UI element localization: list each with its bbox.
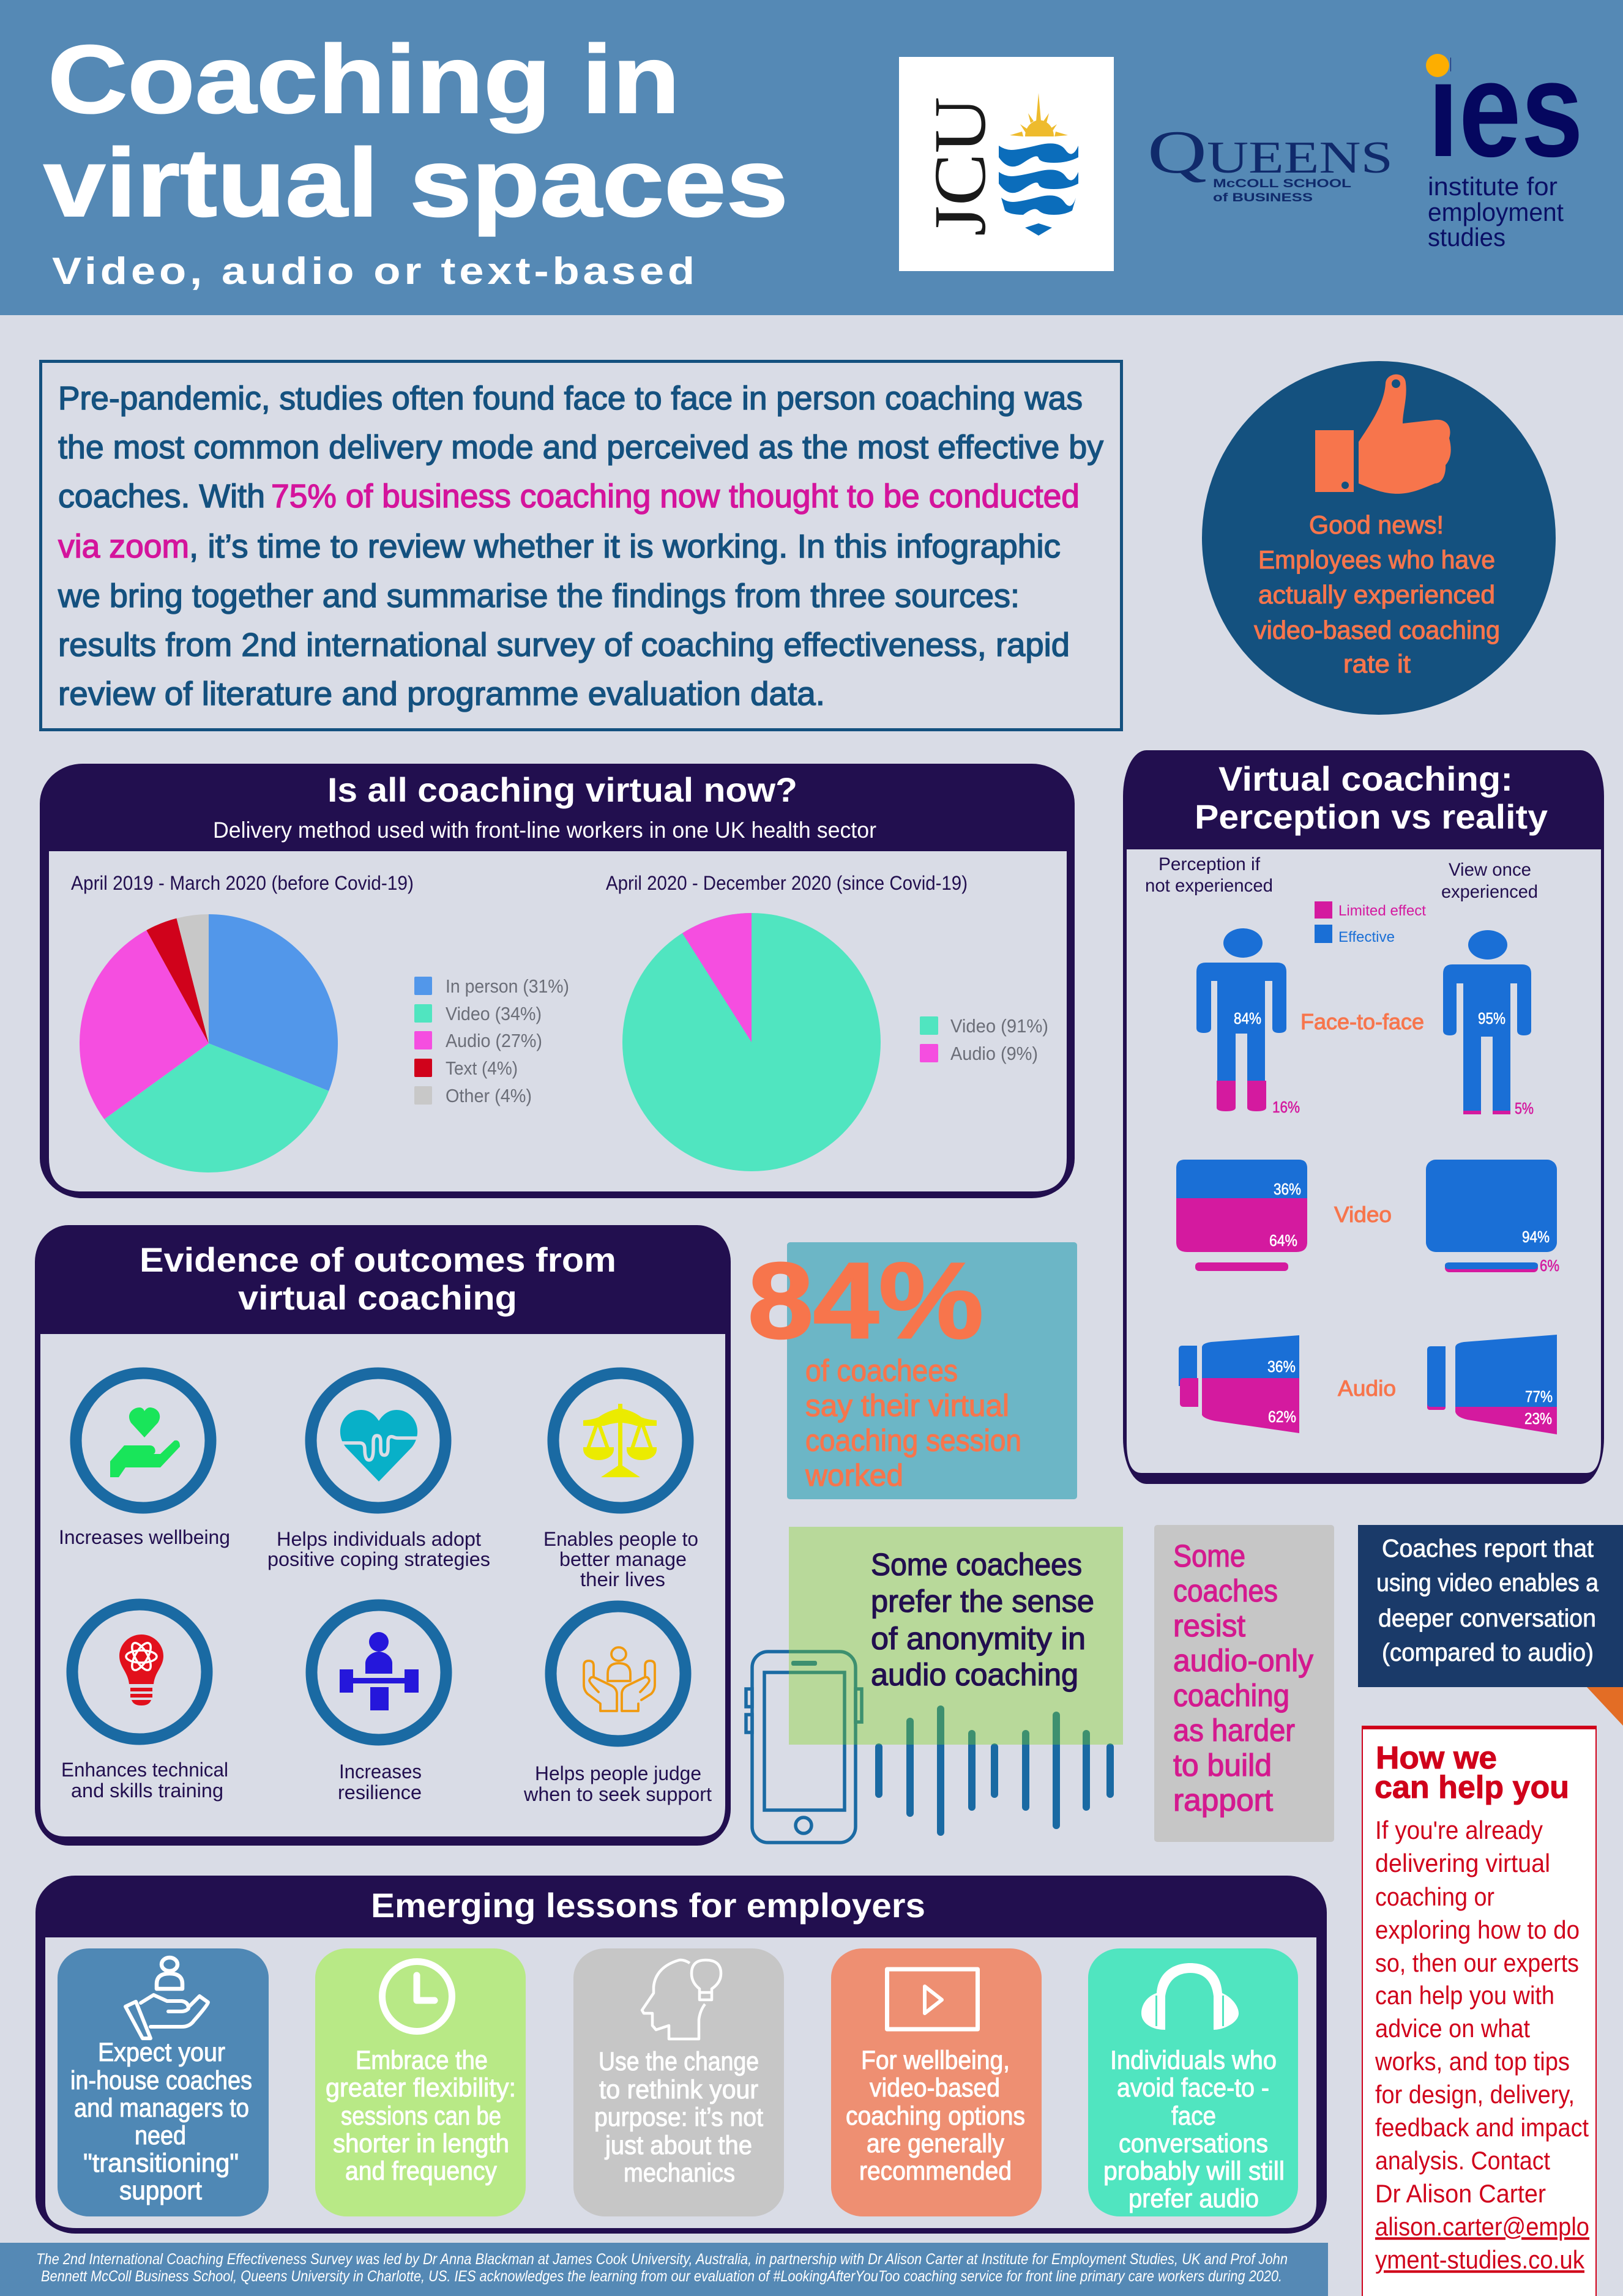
- logo: Queens: McCOLL SCHOOL: [1213, 177, 1352, 190]
- card: video-based options: coaching options: [846, 2101, 1025, 2131]
- header band: [0, 0, 1623, 315]
- heading: Is all coaching virtual now?: [327, 770, 797, 809]
- callout: coaches resist audio-only: [1154, 1525, 1334, 1842]
- logo: Queens: UEENS: [1207, 133, 1393, 183]
- contact text: for design, delivery,: [1375, 2080, 1575, 2109]
- icon: speaker, experienced: [1427, 1335, 1557, 1434]
- intro text box: via zoom: [58, 528, 189, 565]
- heading: Emerging lessons for employers: [371, 1886, 925, 1925]
- icon: speaker, perception: 62%: [1268, 1407, 1296, 1426]
- icon: monitor, experienced: [1426, 1160, 1559, 1275]
- card: in-house coaches: support: [119, 2176, 202, 2205]
- column label: perception if not experienced: not experienced: [1145, 876, 1273, 896]
- legend: since Covid-19: [920, 1015, 1048, 1064]
- callout: anonymity in audio coaching: of anonymity in: [871, 1621, 1086, 1656]
- heading: can help you: [1375, 1770, 1569, 1805]
- contact text: advice on what: [1375, 2014, 1530, 2043]
- contact text: alison.carter@emplo: [1375, 2212, 1589, 2241]
- legend: Limited effect: [1338, 903, 1426, 919]
- callout: 84 percent: coaching session: [805, 1423, 1021, 1458]
- callout: anonymity in audio coaching: [746, 1527, 1123, 1843]
- logo: IES: studies: [1428, 223, 1505, 252]
- icon: video player: [887, 1969, 978, 2029]
- card: prefer audio: avoid face-to -: [1117, 2073, 1269, 2103]
- callout: coaches resist audio-only: as harder: [1173, 1713, 1295, 1748]
- label: face-to-face: Face-to-face: [1300, 1009, 1424, 1034]
- column label: view once experienced: [1441, 860, 1538, 902]
- outcome: increases resilience: resilience: [338, 1781, 422, 1803]
- icon: phone with sound bars: [746, 1652, 1114, 1843]
- panel: perception vs reality: [1123, 750, 1604, 1484]
- outcome: positive coping strategies: positive coping strategies: [267, 1548, 490, 1570]
- heading: How we: [1376, 1740, 1497, 1776]
- pie chart: before Covid-19: April 2019 - March 2020 (before Covid-19): [71, 872, 414, 894]
- card: rethink your purpose: to rethink your: [599, 2075, 758, 2104]
- card: in-house coaches: [58, 1948, 269, 2216]
- panel: evidence of outcomes: [35, 1225, 731, 1846]
- icon: headphones: [1141, 1963, 1239, 2030]
- contact text: works, and top tips: [1375, 2047, 1570, 2076]
- legend: since Covid-19: Video (91%): [950, 1015, 1048, 1037]
- callout: deeper conversation: [1358, 1525, 1623, 1726]
- intro text box: 75% of business coaching now thought to be conducted: [271, 478, 1080, 515]
- outcome: increases resilience: Increases: [339, 1761, 422, 1783]
- heading: Evidence of outcomes from: [140, 1240, 616, 1279]
- card: in-house coaches: and managers to: [74, 2093, 249, 2123]
- column label: view once experienced: experienced: [1441, 882, 1538, 902]
- contact text: If you're already: [1375, 1816, 1543, 1844]
- card: prefer audio: probably will still: [1103, 2156, 1285, 2186]
- outcome: increases wellbeing: Increases wellbeing: [59, 1526, 230, 1548]
- icon: monitor, experienced: 6%: [1540, 1256, 1559, 1275]
- icon: speaker, perception: [1179, 1335, 1299, 1433]
- title: Coaching in: [48, 26, 680, 133]
- callout: anonymity in audio coaching: prefer the sense: [871, 1584, 1094, 1619]
- icon: speaker, experienced: 77%: [1525, 1387, 1553, 1406]
- outcome: when to seek support: [523, 1606, 712, 1805]
- icon: monitor, perception: 36%: [1274, 1180, 1301, 1198]
- pie chart: since Covid-19: [606, 872, 968, 1171]
- contact text: yment-studies.co.uk: [1375, 2245, 1585, 2274]
- legend: [1315, 901, 1426, 945]
- heading: [1375, 1740, 1569, 1805]
- label: video: Video: [1334, 1202, 1392, 1227]
- card: greater flexibility: and frequency: [345, 2156, 497, 2186]
- callout: coaches resist audio-only: Some: [1173, 1538, 1245, 1573]
- card: video-based options: For wellbeing,: [861, 2046, 1010, 2075]
- contact text: can help you with: [1375, 1981, 1554, 2010]
- card: prefer audio: prefer audio: [1129, 2184, 1259, 2213]
- pie chart: before Covid-19: [71, 872, 414, 1172]
- callout: coaches resist audio-only: coaches: [1173, 1573, 1278, 1608]
- outcome: positive coping strategies: [267, 1373, 490, 1570]
- icon: monitor, perception: 64%: [1269, 1231, 1297, 1250]
- legend: before Covid-19: Video (34%): [446, 1003, 542, 1024]
- pie chart: since Covid-19: April 2020 - December 2020 (since Covid-19): [606, 872, 968, 894]
- callout: coaches resist audio-only: to build: [1173, 1748, 1272, 1783]
- footer credits: Bennett McColl Business School, Queens University in Charlotte, US. IES acknowledges the learning from our evaluation of #LookingAfterYouToo coaching service for front line primary care workers during 2020.: [41, 2268, 1282, 2285]
- card: greater flexibility: Embrace the: [356, 2046, 488, 2075]
- callout: good news circle: Employees who have: [1258, 545, 1495, 574]
- icon: person, perception face-to-face: 84%: [1234, 1009, 1261, 1027]
- subheading: Delivery method used with front-line workers in one UK health sector: [213, 818, 876, 843]
- contact text: exploring how to do: [1375, 1915, 1580, 1944]
- column label: view once experienced: View once: [1449, 860, 1531, 880]
- card: greater flexibility: sessions can be: [341, 2101, 501, 2131]
- outcome: better manage their lives: [543, 1373, 698, 1590]
- card: prefer audio: conversations: [1119, 2129, 1268, 2158]
- card: greater flexibility: shorter in length: [333, 2129, 509, 2158]
- icon: speaker, experienced: 23%: [1524, 1409, 1552, 1428]
- outcome: positive coping strategies: Helps individuals adopt: [277, 1528, 481, 1550]
- outcome: better manage their lives: their lives: [580, 1568, 665, 1590]
- intro text box: [40, 361, 1121, 729]
- intro text box: review of literature and programme evaluation data.: [58, 676, 825, 712]
- contact text: so, then our experts: [1375, 1948, 1579, 1977]
- card: video-based options: video-based: [870, 2073, 1000, 2103]
- card: in-house coaches: Expect your: [98, 2038, 225, 2067]
- callout: coaches resist audio-only: coaching: [1173, 1678, 1289, 1713]
- icon: speaker, perception: 36%: [1267, 1357, 1296, 1376]
- callout: 84 percent: say their virtual: [805, 1388, 1009, 1423]
- legend: since Covid-19: Audio (9%): [950, 1043, 1038, 1064]
- heading: [1195, 759, 1548, 836]
- legend: Effective: [1338, 929, 1395, 945]
- callout: good news circle: rate it: [1343, 649, 1411, 678]
- footer credits: The 2nd International Coaching Effectiveness Survey was led by Dr Anna Blackman at James Cook University, Australia, in partnership with Dr Alison Carter at Institute for Employment Studies, UK and Prof John: [36, 2251, 1288, 2268]
- callout: coaches resist audio-only: rapport: [1173, 1783, 1273, 1817]
- card: rethink your purpose: [573, 1948, 784, 2216]
- card: video-based options: are generally: [867, 2129, 1004, 2158]
- intro text box: coaches. With: [58, 478, 265, 515]
- logo: IES: employment: [1428, 198, 1564, 226]
- card: rethink your purpose: purpose: it’s not: [594, 2103, 763, 2132]
- heading: Virtual coaching:: [1218, 759, 1513, 798]
- card: in-house coaches: in-house coaches: [70, 2066, 252, 2095]
- callout: deeper conversation: using video enables a: [1376, 1568, 1599, 1597]
- callout: good news circle: [1202, 361, 1556, 715]
- legend: before Covid-19: In person (31%): [446, 975, 569, 997]
- logo: IES: ies: [1428, 34, 1583, 185]
- logo: Queens: [1147, 118, 1393, 204]
- subtitle: Video, audio or text-based: [52, 250, 698, 293]
- callout: good news circle: video-based coaching: [1254, 616, 1500, 644]
- icon: person, experienced face-to-face: 5%: [1515, 1099, 1534, 1117]
- card: video-based options: recommended: [859, 2156, 1012, 2186]
- logo: JCU: [899, 57, 1114, 271]
- card: in-house coaches: "transitioning": [83, 2149, 239, 2178]
- callout: anonymity in audio coaching: Some coachees: [871, 1547, 1082, 1582]
- intro text box: , it’s time to review whether it is working. In this infographic: [189, 528, 1061, 565]
- callout: 84 percent: of coachees: [805, 1354, 958, 1388]
- panel: is all coaching virtual now: [40, 764, 1075, 1198]
- intro text box: the most common delivery mode and perceived as the most effective by: [58, 429, 1103, 466]
- card: prefer audio: face: [1171, 2101, 1216, 2131]
- panel: how we can help you: [1362, 1726, 1597, 2296]
- card: in-house coaches: need: [135, 2121, 186, 2150]
- callout: coaches resist audio-only: resist: [1173, 1608, 1245, 1643]
- callout: good news circle: actually experienced: [1258, 580, 1495, 609]
- contact text: [1375, 1816, 1589, 2274]
- card: rethink your purpose: just about the: [604, 2131, 752, 2160]
- card: rethink your purpose: mechanics: [624, 2158, 735, 2188]
- outcome: increases resilience: [312, 1605, 446, 1803]
- card: greater flexibility: greater flexibility:: [326, 2073, 516, 2103]
- column label: perception if not experienced: Perception if: [1158, 854, 1261, 874]
- logo: IES: institute for: [1428, 172, 1558, 201]
- card: video-based options: [831, 1948, 1042, 2216]
- column label: perception if not experienced: [1145, 854, 1273, 896]
- callout: anonymity in audio coaching: audio coaching: [871, 1657, 1078, 1692]
- icon: person, experienced face-to-face: [1443, 930, 1534, 1117]
- card: rethink your purpose: Use the change: [599, 2047, 759, 2076]
- legend: before Covid-19: [414, 975, 569, 1106]
- logo: Queens: of BUSINESS: [1213, 192, 1313, 204]
- logo: IES: [1426, 34, 1583, 252]
- outcome: technical and skills training: and skills training: [71, 1780, 223, 1802]
- label: audio: Audio: [1338, 1376, 1396, 1401]
- icon: clock: [382, 1962, 452, 2032]
- outcome: better manage their lives: Enables people to: [543, 1528, 698, 1550]
- card: prefer audio: [1088, 1948, 1298, 2216]
- contact text: delivering virtual: [1375, 1849, 1550, 1877]
- legend: before Covid-19: Text (4%): [446, 1057, 518, 1079]
- title: virtual spaces: [43, 129, 788, 237]
- heading: [140, 1240, 616, 1317]
- legend: before Covid-19: Audio (27%): [446, 1030, 542, 1051]
- callout: deeper conversation: (compared to audio): [1382, 1638, 1594, 1666]
- legend: before Covid-19: Other (4%): [446, 1085, 532, 1106]
- logo: JCU: JCU: [919, 97, 1001, 236]
- icon: head with light bulb: [642, 1960, 721, 2039]
- contact text: analysis. Contact: [1375, 2146, 1550, 2175]
- callout: good news circle: Good news!: [1309, 510, 1444, 539]
- outcome: technical and skills training: [61, 1605, 228, 1802]
- icon: person, perception face-to-face: [1196, 928, 1300, 1116]
- logo: Queens: Q: [1147, 118, 1207, 186]
- intro text box: we bring together and summarise the findings from three sources:: [58, 578, 1020, 614]
- icon: person, perception face-to-face: 16%: [1272, 1098, 1300, 1116]
- callout: 84 percent: worked: [805, 1458, 903, 1493]
- callout: deeper conversation: Coaches report that: [1382, 1534, 1594, 1562]
- panel: emerging lessons for employers: [35, 1876, 1327, 2234]
- callout: 84 percent: 84%: [748, 1241, 983, 1361]
- callout: coaches resist audio-only: audio-only: [1173, 1643, 1313, 1678]
- icon: person, experienced face-to-face: 95%: [1478, 1009, 1505, 1027]
- card: prefer audio: Individuals who: [1110, 2046, 1277, 2075]
- outcome: when to seek support: when to seek support: [523, 1783, 712, 1805]
- callout: 84 percent: [748, 1241, 1077, 1499]
- icon: monitor, perception: [1176, 1160, 1307, 1271]
- contact text: coaching or: [1375, 1882, 1494, 1911]
- outcome: when to seek support: Helps people judge: [535, 1762, 701, 1784]
- icon: person in hand: [125, 1958, 208, 2038]
- card: greater flexibility: [315, 1948, 526, 2216]
- footer credits: [0, 2243, 1328, 2296]
- contact text: feedback and impact: [1375, 2113, 1589, 2142]
- icon: monitor, experienced: 94%: [1522, 1228, 1550, 1246]
- callout: deeper conversation: deeper conversation: [1378, 1604, 1596, 1632]
- heading: Perception vs reality: [1195, 797, 1548, 836]
- outcome: better manage their lives: better manage: [559, 1548, 687, 1570]
- heading: virtual coaching: [238, 1278, 517, 1317]
- outcome: technical and skills training: Enhances technical: [61, 1759, 228, 1781]
- title: [43, 26, 788, 237]
- icon: thumbs up: [1315, 375, 1451, 494]
- outcome: increases wellbeing: [59, 1373, 230, 1548]
- contact text: Dr Alison Carter: [1375, 2179, 1546, 2208]
- intro text box: Pre-pandemic, studies often found face to face in person coaching was: [58, 380, 1083, 417]
- intro text box: results from 2nd international survey of coaching effectiveness, rapid: [58, 627, 1070, 663]
